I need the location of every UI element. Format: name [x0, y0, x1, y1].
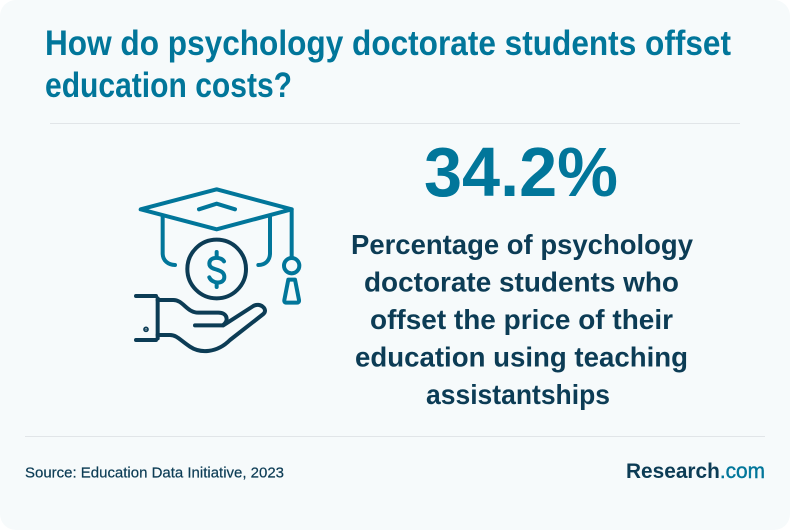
title: How do psychology doctorate students offset — [45, 24, 731, 63]
big statistic: 34.2% — [424, 133, 618, 211]
statistic description: Percentage of psychology — [351, 229, 693, 260]
statistic description: doctorate students who — [364, 266, 679, 298]
statistic description: assistantships — [426, 379, 610, 410]
source note: Source: Education Data Initiative, 2023 — [25, 466, 284, 482]
icon: dollar coin — [187, 240, 246, 298]
icon: graduation cap — [141, 189, 299, 303]
statistic description: offset the price of their — [370, 304, 673, 335]
logo: Research.com: Research.com — [626, 460, 765, 483]
title: education costs? — [45, 66, 292, 105]
icon: open hand — [136, 296, 265, 351]
statistic description: education using teaching — [355, 342, 688, 372]
icon: graduation cap over coin and hand — [136, 189, 299, 351]
title — [45, 24, 731, 105]
statistic description — [351, 229, 693, 410]
